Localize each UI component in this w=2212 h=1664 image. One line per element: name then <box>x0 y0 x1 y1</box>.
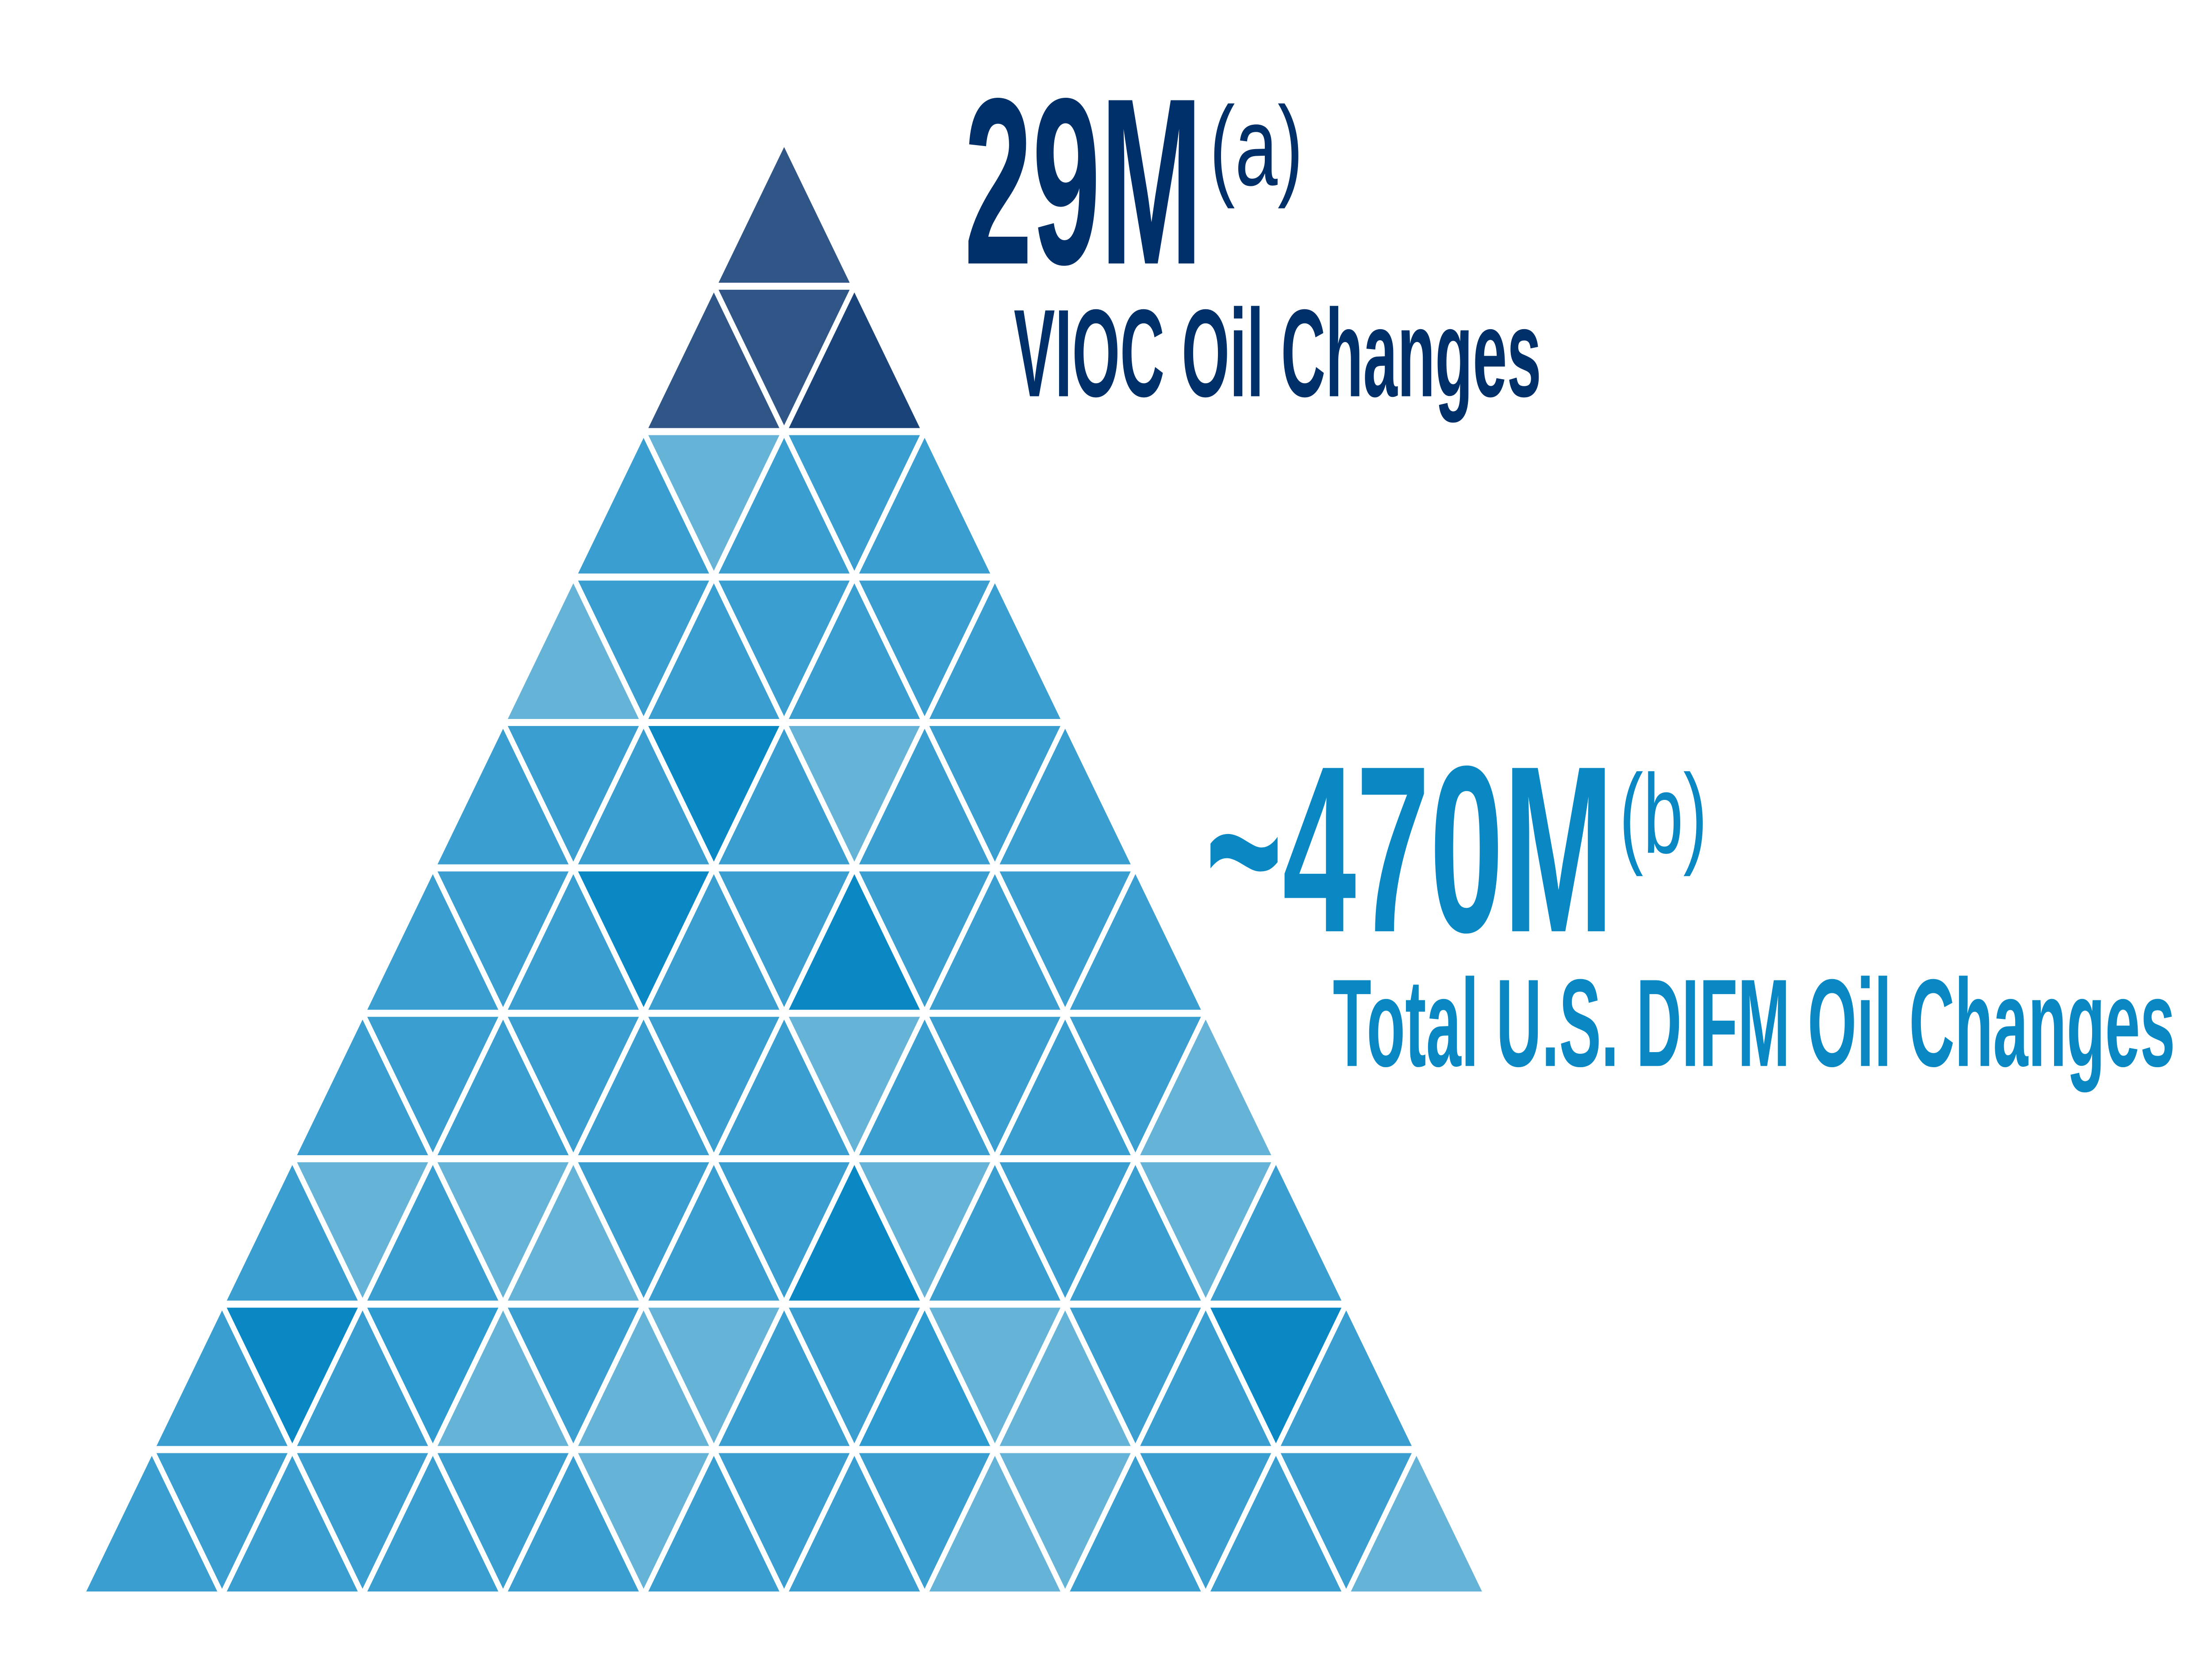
stat: 29M VIOC <box>964 49 1541 423</box>
pyramid of triangles <box>81 141 1487 1595</box>
stat: 470M DIFM <box>1205 717 2175 1093</box>
stat: 29M VIOC: 29M <box>964 49 1202 314</box>
stat: 29M VIOC: (a) <box>1210 83 1303 209</box>
stat: 29M VIOC: VIOC Oil Changes <box>1014 283 1541 423</box>
stat: 470M DIFM: ~470M <box>1205 717 1613 982</box>
stat: 470M DIFM: (b) <box>1619 751 1707 877</box>
